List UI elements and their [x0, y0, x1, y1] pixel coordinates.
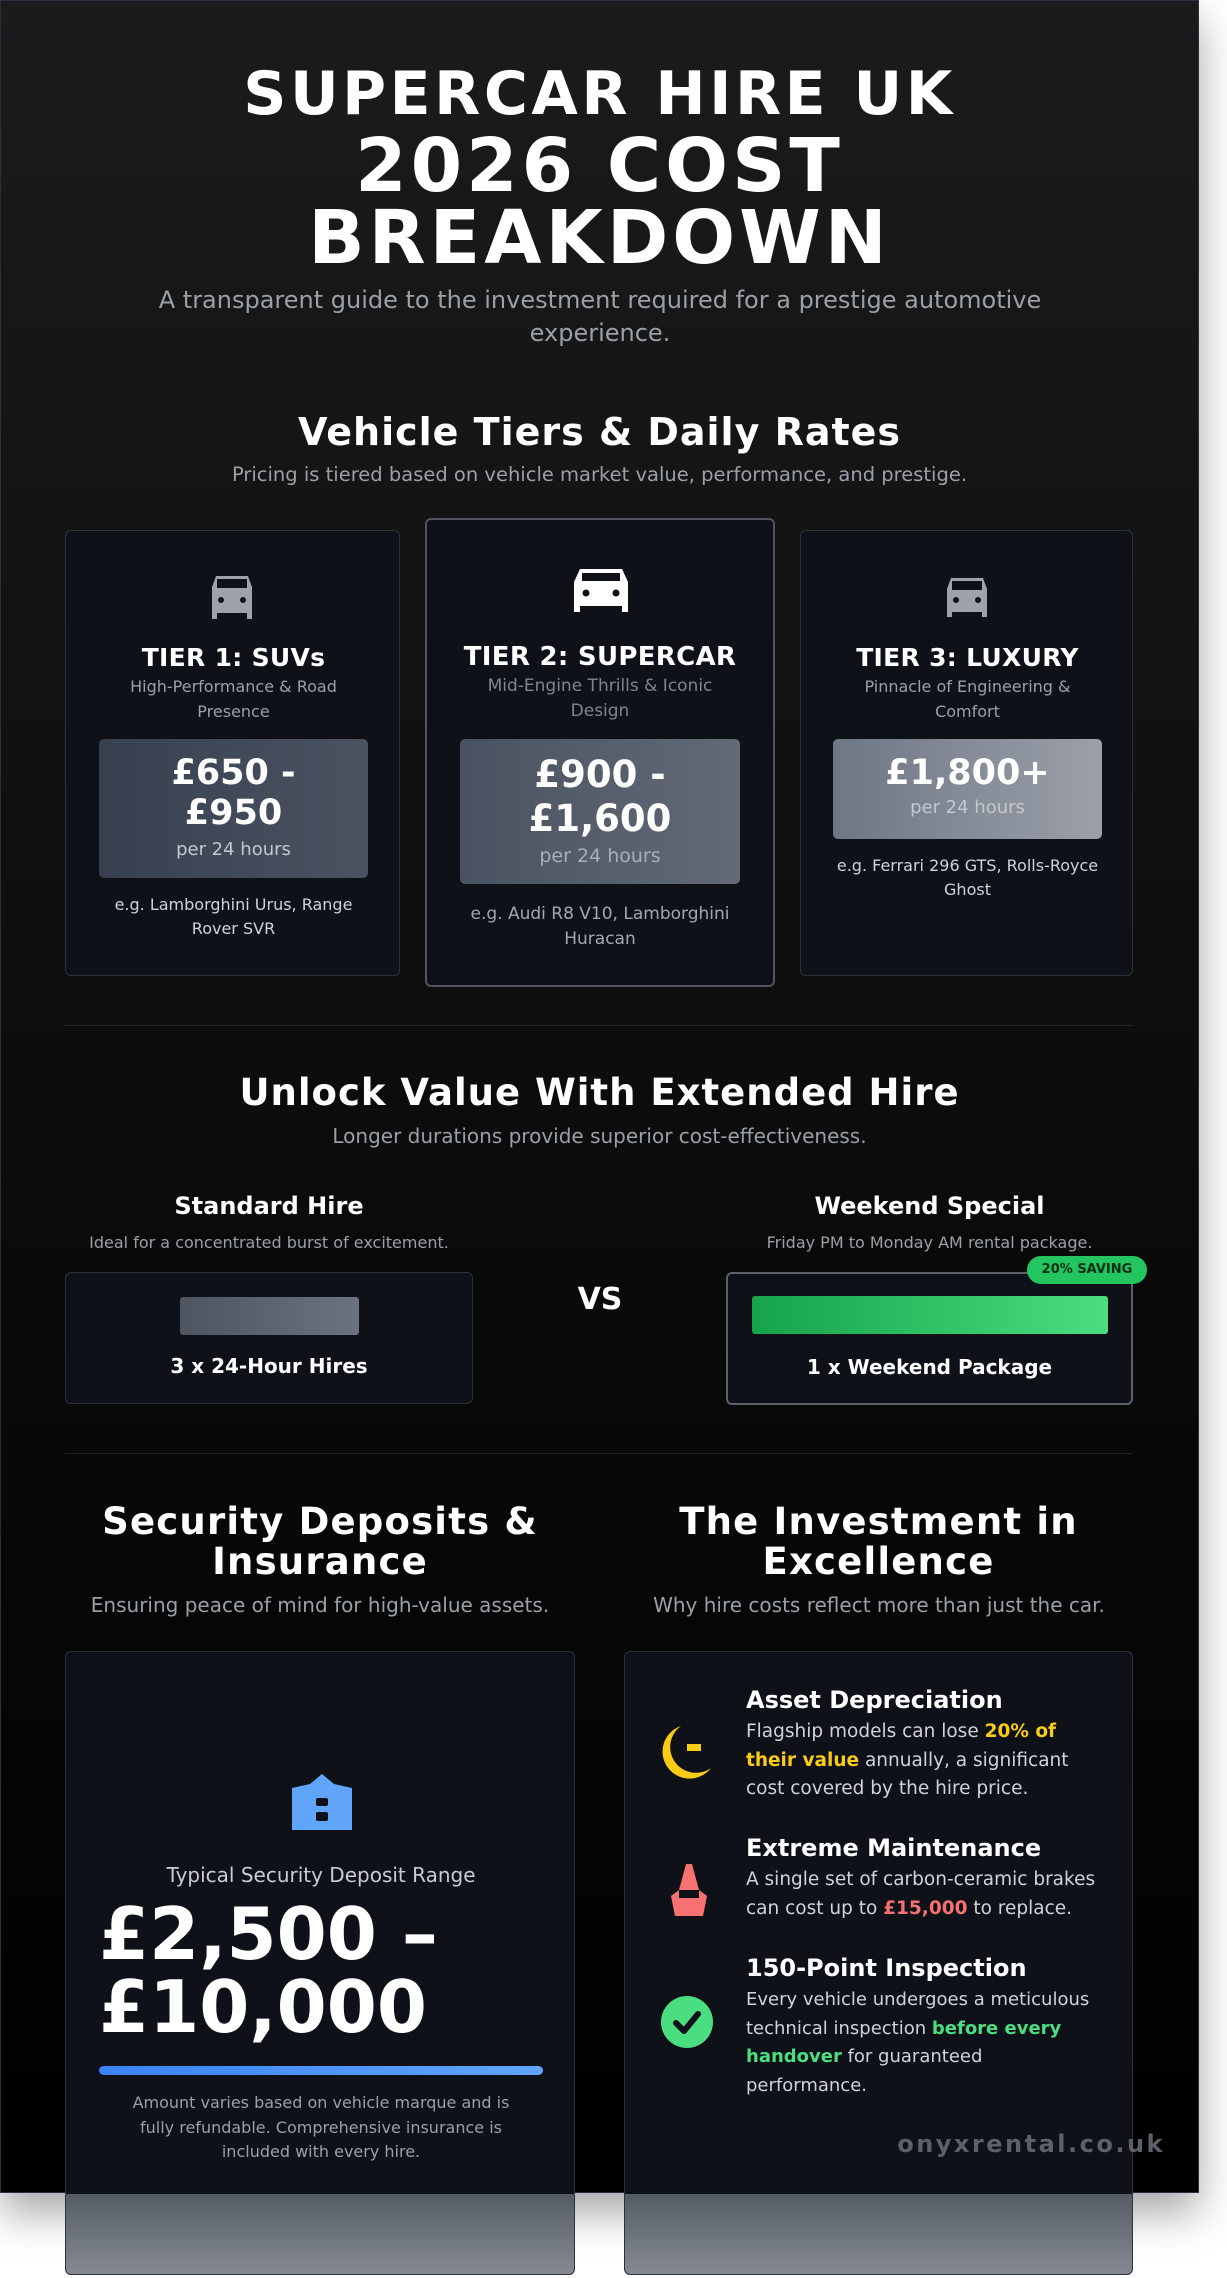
tier title: TIER 2: SUPERCAR [464, 642, 736, 672]
item: inspection [661, 1954, 1089, 2096]
title [243, 59, 956, 281]
panel: tier 1 [65, 530, 400, 976]
tier title: TIER 1: SUVs [142, 643, 325, 672]
deposit amount: £10,000 [99, 1965, 427, 2049]
title: Asset Depreciation [746, 1686, 1003, 1714]
price box: £1,800+ [885, 753, 1050, 793]
heading: security deposits: Security Deposits & [102, 1500, 538, 1543]
title: BREAKDOWN [308, 195, 891, 281]
icon: brake cone [671, 1864, 707, 1916]
badge: 20% saving: 20% SAVING [1042, 1262, 1132, 1277]
vs: VS [578, 1282, 622, 1317]
price box [460, 739, 740, 884]
tier title: TIER 3: LUXURY [856, 643, 1079, 672]
heading: security deposits: Insurance [212, 1540, 428, 1583]
price box: per 24 hours [539, 845, 661, 867]
tier subtitle: Pinnacle of Engineering & Comfort [864, 677, 1071, 721]
item: asset depreciation [662, 1686, 1069, 1799]
subheading investment: Why hire costs reflect more than just the car. [653, 1593, 1105, 1617]
icon: car [212, 576, 252, 619]
examples: e.g. Ferrari 296 GTS, Rolls-Royce Ghost [837, 856, 1098, 899]
price box: £650 - [171, 753, 296, 793]
label: 3 x 24-Hour Hires [170, 1354, 368, 1378]
heading: investment: Excellence [762, 1540, 994, 1583]
watermark: onyxrental.co.uk [897, 2130, 1165, 2158]
standard box [65, 1272, 473, 1404]
icon: check [661, 1996, 713, 2048]
text: Every vehicle undergoes a meticulous technical inspection before every handover for guaranteed performance. [746, 1989, 1089, 2096]
note: Amount varies based on vehicle marque and is fully refundable. Comprehensive insurance is included with every hire. [133, 2093, 509, 2161]
price box: £900 - [534, 753, 666, 796]
standard subtitle: Ideal for a concentrated burst of excitement. [89, 1233, 449, 1252]
weekend title: Weekend Special [814, 1192, 1044, 1220]
title: 2026 COST [355, 123, 844, 209]
heading: investment [679, 1500, 1078, 1583]
price box [833, 739, 1102, 839]
price box: £1,600 [529, 797, 671, 840]
title: SUPERCAR HIRE UK [243, 59, 956, 129]
item: extreme maintenance [671, 1834, 1095, 1918]
panel: tier 2 [425, 518, 775, 987]
heading: vehicle tiers: Vehicle Tiers & Daily Rates [298, 410, 901, 454]
standard title: Standard Hire [174, 1192, 364, 1220]
examples: e.g. Lamborghini Urus, Range Rover SVR [115, 895, 352, 938]
panel: security deposit [65, 1651, 575, 2275]
icon: car [574, 569, 628, 612]
icon: moon [662, 1726, 711, 1779]
panel: standard hire [65, 1192, 473, 1404]
subheading security: Ensuring peace of mind for high-value assets. [91, 1593, 549, 1617]
panel: tier 3 [800, 530, 1133, 976]
panel: weekend special [726, 1192, 1147, 1405]
badge: 20% saving [1027, 1256, 1147, 1284]
subtitle: A transparent guide to the investment required for a prestige automotive experience. [159, 286, 1041, 347]
price box [99, 739, 368, 878]
icon: shield [292, 1774, 352, 1830]
weekend box [726, 1272, 1133, 1405]
text: Flagship models can lose 20% of their value annually, a significant cost covered by the hire price. [746, 1721, 1069, 1799]
heading: extended hire: Unlock Value With Extended Hire [239, 1071, 960, 1114]
blue bar [99, 2066, 543, 2075]
grey bar [180, 1297, 359, 1335]
price box: per 24 hours [176, 839, 291, 860]
text: A single set of carbon-ceramic brakes can cost up to £15,000 to replace. [746, 1869, 1095, 1918]
price box: £950 [185, 793, 282, 833]
green bar [752, 1296, 1108, 1334]
weekend subtitle: Friday PM to Monday AM rental package. [767, 1233, 1092, 1252]
subheading extended: Longer durations provide superior cost-effectiveness. [332, 1124, 867, 1148]
heading: investment: The Investment in [679, 1500, 1078, 1543]
tier subtitle: High-Performance & Road Presence [130, 677, 337, 721]
title: Extreme Maintenance [746, 1834, 1041, 1862]
deposit label: Typical Security Deposit Range [166, 1863, 476, 1887]
examples: e.g. Audi R8 V10, Lamborghini Huracan [470, 904, 730, 949]
subheading tiers: Pricing is tiered based on vehicle market value, performance, and prestige. [232, 463, 967, 486]
tier subtitle: Mid-Engine Thrills & Iconic Design [488, 676, 712, 721]
heading: security deposits [102, 1500, 538, 1583]
price box: per 24 hours [910, 797, 1025, 818]
deposit amount: £2,500 – [99, 1892, 438, 1976]
title: 150-Point Inspection [746, 1954, 1027, 1982]
icon: car [947, 578, 987, 617]
panel: investment [624, 1651, 1133, 2275]
label: 1 x Weekend Package [807, 1355, 1052, 1379]
deposit amount [99, 1892, 438, 2049]
